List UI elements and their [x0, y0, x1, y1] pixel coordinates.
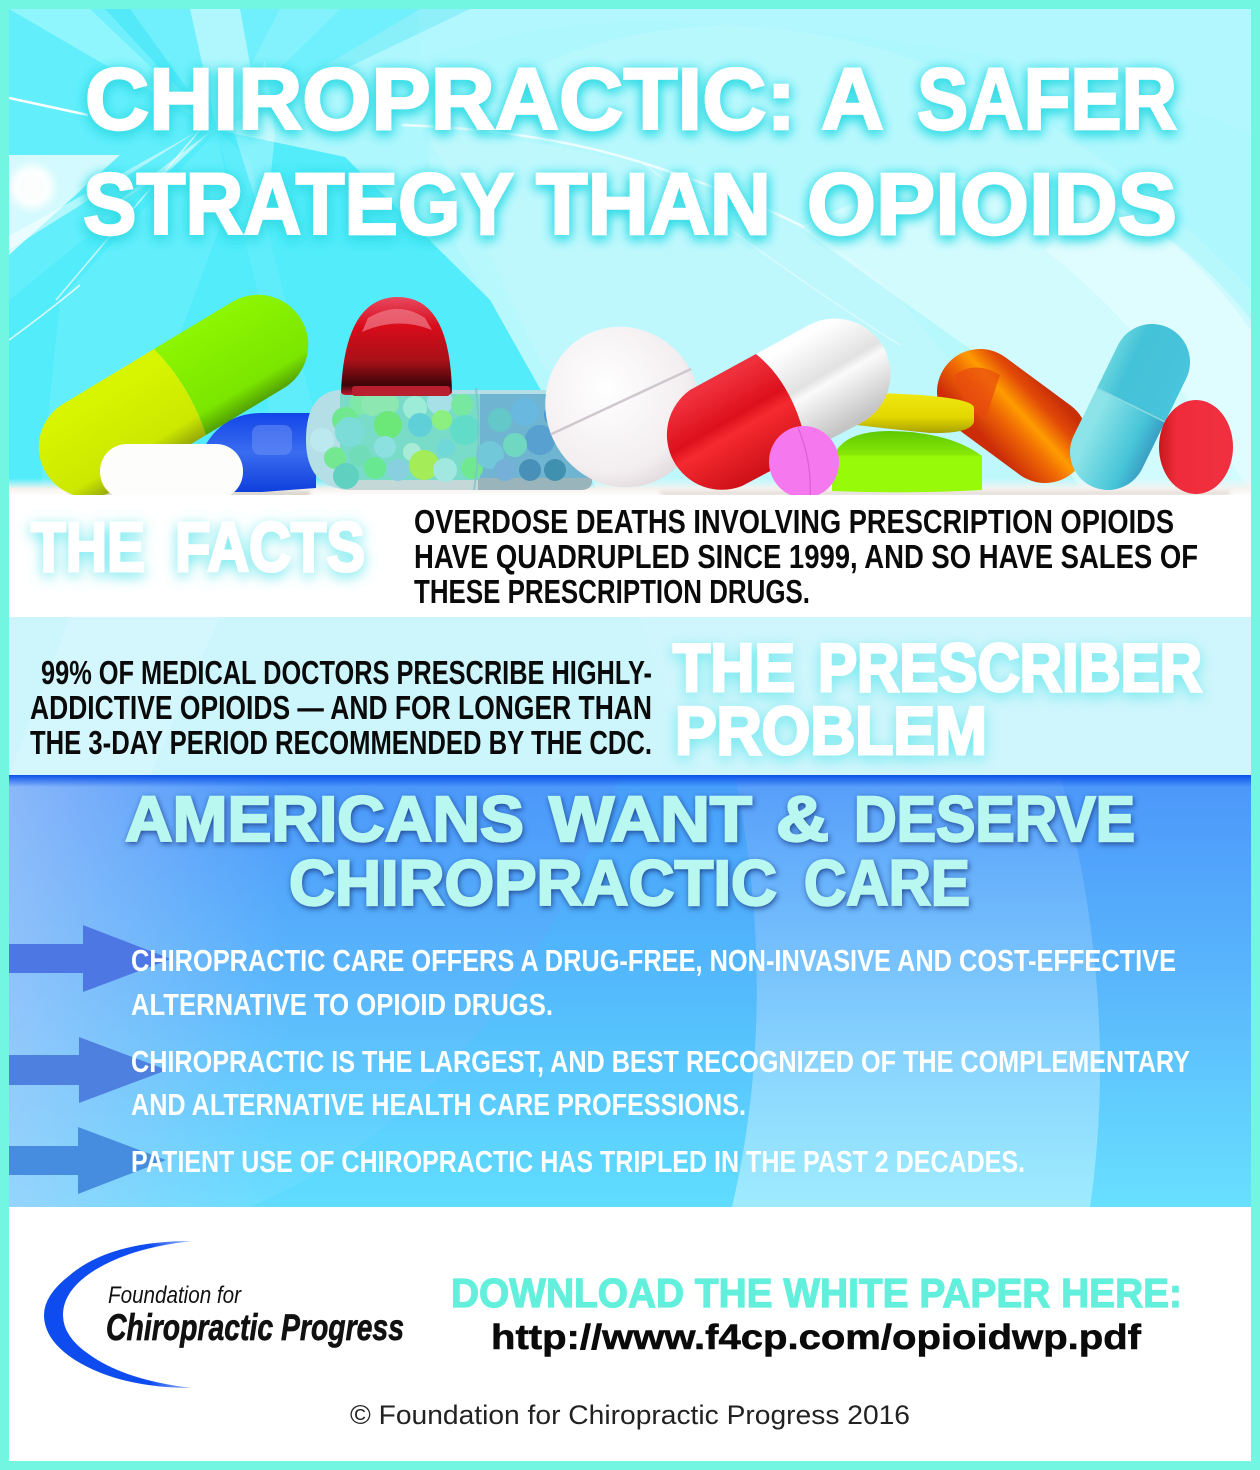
text: benefits list [131, 943, 1190, 1179]
panel: americans want and deserve [9, 775, 1251, 1207]
title: STRATEGY [83, 156, 514, 253]
heading: americans want [125, 783, 1135, 919]
heading: americans want: AMERICANS [125, 783, 524, 855]
pill: pink tablet [763, 420, 845, 504]
heading: the prescriber problem: PROBLEM [675, 693, 987, 769]
text: overdose deaths: THESE PRESCRIPTION DRUGS. [414, 573, 810, 610]
illustration: pills [9, 295, 1251, 513]
text: 99 percent: ADDICTIVE OPIOIDS — AND FOR LONGER THAN [30, 689, 652, 726]
panel: footer [9, 1207, 1251, 1461]
logo: foundation for chiropractic progress: Chiropractic Progress [106, 1307, 404, 1348]
pill: glass capsule with beads [306, 388, 592, 490]
heading: americans want: CARE [804, 847, 970, 919]
logo: foundation for chiropractic progress: Foundation for [108, 1282, 242, 1309]
pill: white round tablet [519, 301, 728, 513]
pill: green tablet [832, 431, 982, 492]
panel: the prescriber problem [9, 617, 1251, 775]
pill: red cap [341, 297, 452, 396]
title: OPIOIDS [807, 156, 1177, 253]
text: 99 percent [30, 654, 652, 761]
arrow: third [9, 1127, 166, 1194]
logo: foundation for chiropractic progress [44, 1241, 404, 1388]
title [83, 51, 1177, 253]
title: A [821, 51, 884, 148]
heading: the prescriber problem: THE [673, 630, 795, 706]
heading: americans want: DESERVE [854, 783, 1135, 855]
call to action: download: DOWNLOAD THE WHITE PAPER HERE: [451, 1270, 1182, 1316]
link: white paper url: http://www.f4cp.com/opioidwp.pdf [491, 1318, 1141, 1357]
pill: lime and green capsule [39, 295, 308, 497]
text: overdose deaths [414, 503, 1198, 610]
pill: red round tablet [1159, 400, 1233, 494]
pill: blue capsule [198, 413, 316, 492]
text: 99 percent: THE 3-DAY PERIOD RECOMMENDED BY THE CDC. [30, 724, 652, 761]
heading: the facts: FACTS [175, 508, 365, 586]
arrow: first [9, 925, 171, 992]
text: benefits list: ALTERNATIVE TO OPIOID DRUGS. [131, 987, 553, 1022]
heading: americans want: WANT [549, 783, 752, 855]
panel: header background [9, 9, 1251, 495]
floor shadow [9, 478, 1251, 496]
text: benefits list: PATIENT USE OF CHIROPRACTIC HAS TRIPLED IN THE PAST 2 DECADES. [131, 1144, 1025, 1179]
heading: americans want: CHIROPRACTIC [289, 847, 777, 919]
title: THAN [536, 156, 771, 253]
pill: red and white capsule [667, 319, 890, 490]
heading: americans want: & [776, 783, 829, 855]
text: 99 percent: 99% OF MEDICAL DOCTORS PRESCRIBE HIGHLY- [41, 654, 652, 691]
heading: the prescriber problem: PRESCRIBER [818, 630, 1202, 706]
title: SAFER [917, 51, 1177, 148]
heading: the prescriber problem [673, 630, 1202, 769]
pill: orange softgel [955, 368, 1045, 440]
text: benefits list: AND ALTERNATIVE HEALTH CARE PROFESSIONS. [131, 1087, 746, 1122]
arrow: second [9, 1037, 167, 1103]
panel: the facts [9, 495, 1251, 617]
heading: the facts: THE [31, 508, 145, 586]
contact shadows [70, 492, 1230, 496]
pill: white tablet [100, 444, 243, 499]
pill: teal capsule [1070, 324, 1190, 490]
copyright: © Foundation for Chiropractic Progress 2016 [350, 1400, 910, 1430]
heading: the facts [31, 508, 365, 586]
title: CHIROPRACTIC: [85, 51, 796, 148]
pill: yellow tablet [840, 393, 974, 433]
